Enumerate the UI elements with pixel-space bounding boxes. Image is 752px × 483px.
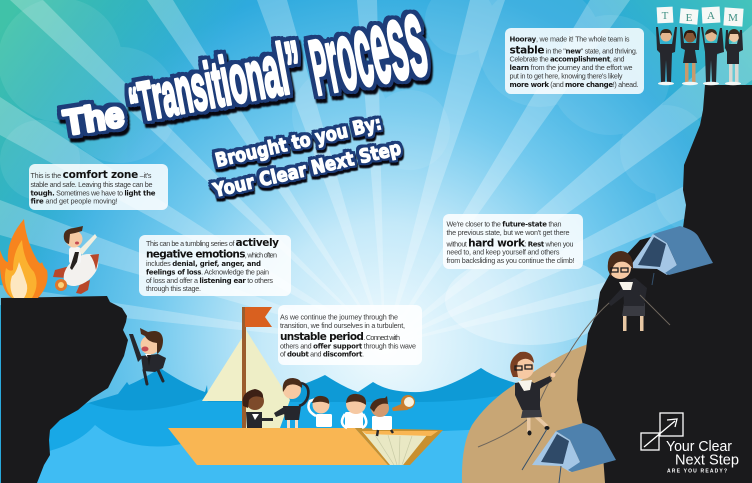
panel: hard work: the previous state, but we won't get there (446, 228, 570, 237)
panel: unstable period: of doubt and discomfort. (280, 350, 364, 358)
hanging man (129, 328, 166, 384)
logo (641, 413, 739, 474)
panel: comfort zone: This is the comfort zone –it's (30, 169, 152, 181)
left cliff (1, 296, 128, 483)
subtitle: Brought to you By: (213, 112, 384, 172)
panel: stable: learn from the journey and the effort we (510, 63, 632, 72)
panel: stable: more work (and more change!) ahead. (510, 80, 638, 89)
panel: hard work (443, 214, 583, 269)
boat crew (242, 378, 415, 436)
team on cliff: T (662, 10, 669, 22)
rocket rider (53, 226, 104, 294)
team on cliff (656, 7, 744, 85)
panel: hard work: We're closer to the future-state than (446, 220, 562, 228)
panel: comfort zone (29, 164, 168, 210)
panel: negative emotions (139, 235, 291, 296)
panel: comfort zone: fire and get people moving! (31, 196, 118, 206)
panel: negative emotions: through this stage. (146, 284, 201, 293)
upper tent (629, 226, 713, 285)
rope (478, 295, 670, 447)
panel: comfort zone: stable and safe. Leaving this stage can be (30, 180, 152, 189)
panel: stable: Hooray, we made it! The whole team is (510, 34, 630, 44)
panel: unstable period: unstable period. Connect with (280, 331, 400, 343)
panel: negative emotions: includes denial, grief, anger, and (146, 259, 261, 268)
panel: hard work: need to, and keep yourself and others (446, 248, 560, 256)
title: “Transitional” (121, 27, 309, 138)
lower tent (522, 423, 616, 483)
panel: negative emotions: of loss and offer a listening ear to others (146, 276, 273, 285)
team on cliff: A (707, 10, 715, 22)
title (61, 0, 435, 143)
logo: Next Step (675, 452, 739, 468)
panel: unstable period: transition, we find ourselves in a turbulent, (280, 321, 405, 330)
panel: stable: Celebrate the accomplishment, and (510, 54, 624, 64)
climbing woman upper (608, 251, 647, 331)
panel: stable: put in to get here, knowing there's likely (510, 72, 623, 80)
panel: unstable period: others and offer support through this wave (280, 342, 416, 350)
panel: stable (505, 28, 644, 94)
sea waves (30, 368, 520, 483)
sand hill (462, 340, 610, 483)
panel: hard work: without hard work: Rest when you (446, 238, 574, 250)
right cliff (577, 85, 752, 483)
panel: unstable period (278, 305, 422, 365)
boat (168, 307, 443, 465)
panel: comfort zone: tough. Sometimes we have to light the (30, 188, 156, 198)
panel: unstable period: As we continue the journey through the (280, 312, 398, 322)
panel: negative emotions: feelings of loss. Acknowledge the pain (146, 268, 269, 276)
icon: fire (0, 219, 48, 298)
team on cliff: M (728, 12, 738, 24)
logo: Your Clear (666, 438, 732, 455)
title: The (61, 95, 127, 143)
climbing woman lower (510, 352, 556, 436)
logo: ARE YOU READY? (667, 468, 727, 474)
team on cliff: E (686, 12, 693, 24)
panel: negative emotions: negative emotions, which often (146, 248, 277, 260)
subtitle: Your Clear Next Step (210, 137, 403, 202)
panel: stable: stable in the "new" state, and thriving. (510, 44, 638, 56)
panel: hard work: from backsliding as you continue the climb! (446, 256, 574, 265)
panel: negative emotions: This can be a tumbling series of actively (146, 237, 279, 249)
